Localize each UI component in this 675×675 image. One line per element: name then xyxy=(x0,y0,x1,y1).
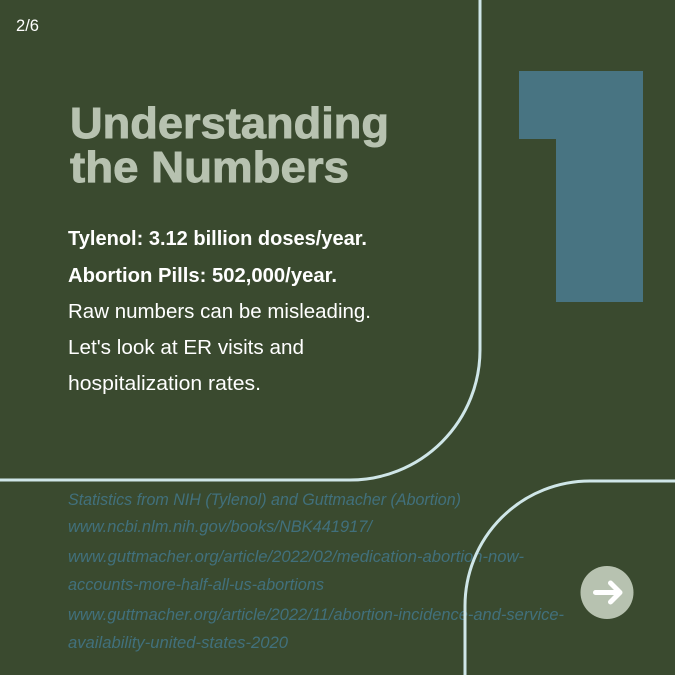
body text: Abortion Pills: 502,000/year. xyxy=(68,264,337,287)
sources footnote: accounts-more-half-all-us-abortions xyxy=(68,576,324,594)
body text: Tylenol: 3.12 billion doses/year. xyxy=(68,227,367,250)
sources footnote: www.ncbi.nlm.nih.gov/books/NBK441917/ xyxy=(68,518,373,536)
body text xyxy=(68,227,371,395)
icon: next arrow button xyxy=(580,566,634,619)
title: Understanding xyxy=(70,99,389,148)
sources footnote: availability-united-states-2020 xyxy=(68,634,289,652)
title: the Numbers xyxy=(70,143,349,192)
sources footnote xyxy=(68,491,564,652)
sources footnote: www.guttmacher.org/article/2022/02/medication-abortion-now- xyxy=(68,548,524,566)
title xyxy=(70,99,389,192)
body text: Let's look at ER visits and xyxy=(68,336,304,359)
page counter: 2/6 xyxy=(16,17,39,35)
body text: Raw numbers can be misleading. xyxy=(68,300,371,323)
lower rounded divider line xyxy=(465,481,675,675)
body text: hospitalization rates. xyxy=(68,372,261,395)
upper rounded divider line xyxy=(0,0,480,480)
big numeral 1 shape xyxy=(519,71,643,302)
sources footnote: www.guttmacher.org/article/2022/11/abortion-incidence-and-service- xyxy=(68,606,564,624)
sources footnote: Statistics from NIH (Tylenol) and Guttmacher (Abortion) xyxy=(68,491,461,509)
